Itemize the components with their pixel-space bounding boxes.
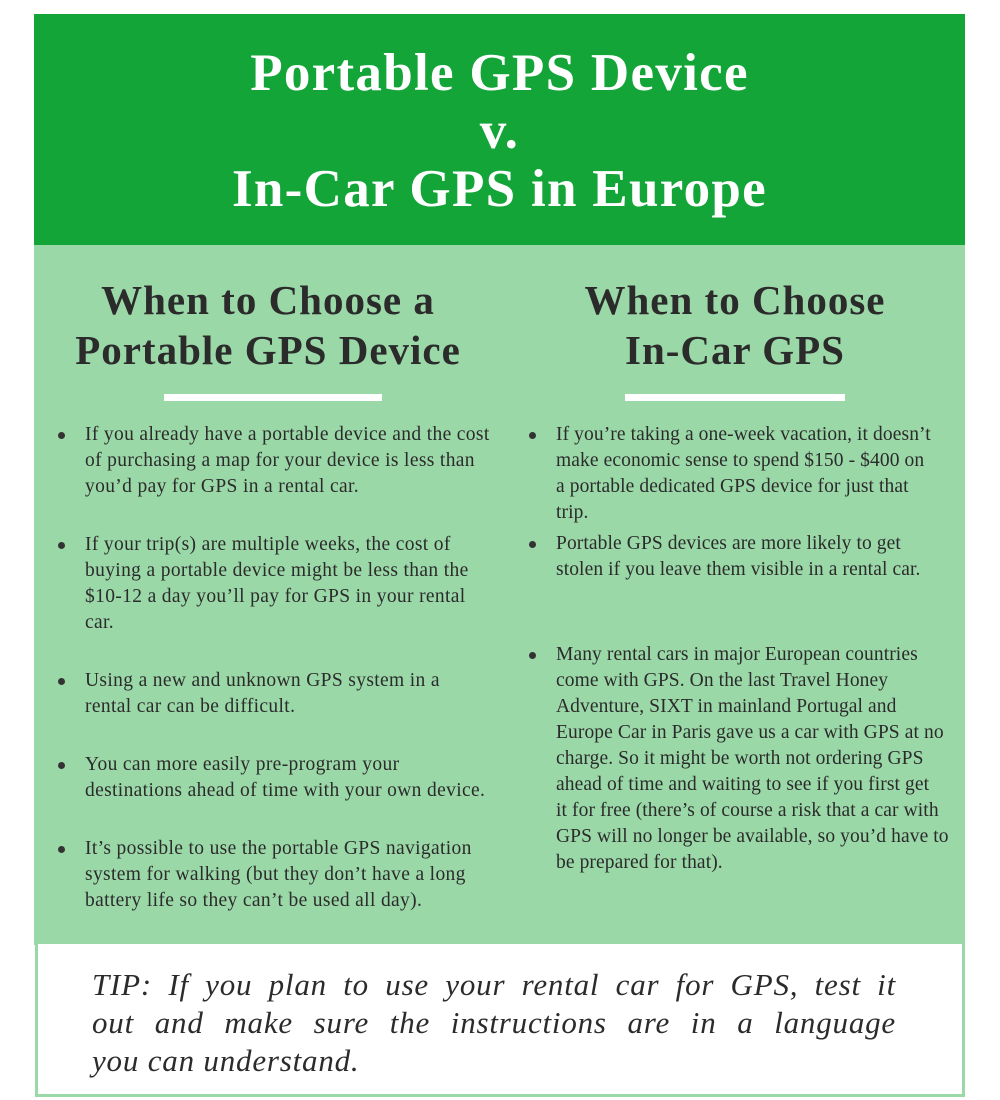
bullet r1: make economic sense to spend $150 - $400 on — [556, 450, 924, 471]
tip box — [35, 944, 965, 1097]
bullet 3: rental car can be difficult. — [85, 696, 295, 717]
bullet r3: charge. So it might be worth not ordering GPS — [556, 748, 924, 769]
bullet r1: If you’re taking a one-week vacation, it doesn’t — [556, 424, 931, 445]
bullet list left — [58, 424, 490, 911]
bullet r3 — [529, 644, 949, 873]
title: In-Car GPS in Europe — [232, 160, 767, 218]
bullet r3: be prepared for that). — [556, 852, 723, 873]
bullet 2: car. — [85, 612, 114, 633]
divider bar right — [625, 394, 845, 401]
heading: in-car column: When to Choose — [584, 277, 886, 323]
header banner — [34, 14, 965, 245]
panel: comparison columns — [34, 245, 965, 945]
bullet r3: come with GPS. On the last Travel Honey — [556, 670, 888, 691]
bullet 4: destinations ahead of time with your own device. — [85, 780, 485, 801]
bullet 1: you’d pay for GPS in a rental car. — [85, 476, 359, 497]
heading: in-car column — [584, 277, 886, 373]
bullet list right — [529, 424, 949, 873]
bullet 4 — [58, 754, 485, 801]
bullet 1: of purchasing a map for your device is less than — [85, 450, 475, 471]
tip text — [89, 967, 896, 1078]
heading: portable column: Portable GPS Device — [75, 327, 461, 373]
bullet 3: Using a new and unknown GPS system in a — [85, 670, 440, 691]
title: Portable GPS Device — [250, 44, 749, 102]
bullet 5: It’s possible to use the portable GPS navigation — [85, 838, 472, 859]
tip text: TIP: If you plan to use your rental car for GPS, test it — [92, 967, 896, 1002]
bullet 3 — [58, 670, 440, 717]
bullet 5: system for walking (but they don’t have a long — [85, 864, 466, 885]
bullet r2: stolen if you leave them visible in a rental car. — [556, 559, 920, 580]
bullet r3: Many rental cars in major European countries — [556, 644, 918, 665]
bullet 5: battery life so they can’t be used all day). — [85, 890, 422, 911]
bullet r3: Adventure, SIXT in mainland Portugal and — [556, 696, 896, 717]
bullet 5 — [58, 838, 472, 911]
bullet r1: trip. — [556, 502, 588, 523]
bullet 2 — [58, 534, 469, 633]
bullet 2: $10-12 a day you’ll pay for GPS in your rental — [85, 586, 466, 607]
bullet 2: buying a portable device might be less than the — [85, 560, 469, 581]
tip text: out and make sure the instructions are in a language — [92, 1005, 896, 1040]
bullet r3: Europe Car in Paris gave us a car with GPS at no — [556, 722, 944, 743]
heading: portable column: When to Choose a — [101, 277, 435, 323]
bullet r2: Portable GPS devices are more likely to get — [556, 533, 901, 554]
bullet 2: If your trip(s) are multiple weeks, the cost of — [85, 534, 451, 555]
title: v. — [480, 102, 519, 160]
bullet r3: GPS will no longer be available, so you’d have to — [556, 826, 949, 847]
bullet r3: ahead of time and waiting to see if you first get — [556, 774, 929, 795]
title — [232, 44, 767, 218]
bullet 4: You can more easily pre-program your — [85, 754, 399, 775]
bullet 1 — [58, 424, 490, 497]
tip text: you can understand. — [92, 1043, 359, 1078]
bullet 1: If you already have a portable device and the cost — [85, 424, 490, 445]
heading: in-car column: In-Car GPS — [625, 327, 845, 373]
divider bar left — [164, 394, 382, 401]
bullet r3: it for free (there’s of course a risk that a car with — [556, 800, 939, 821]
heading: portable column — [75, 277, 461, 373]
bullet r1 — [529, 424, 931, 523]
bullet r2 — [529, 533, 920, 580]
bullet r1: a portable dedicated GPS device for just that — [556, 476, 909, 497]
